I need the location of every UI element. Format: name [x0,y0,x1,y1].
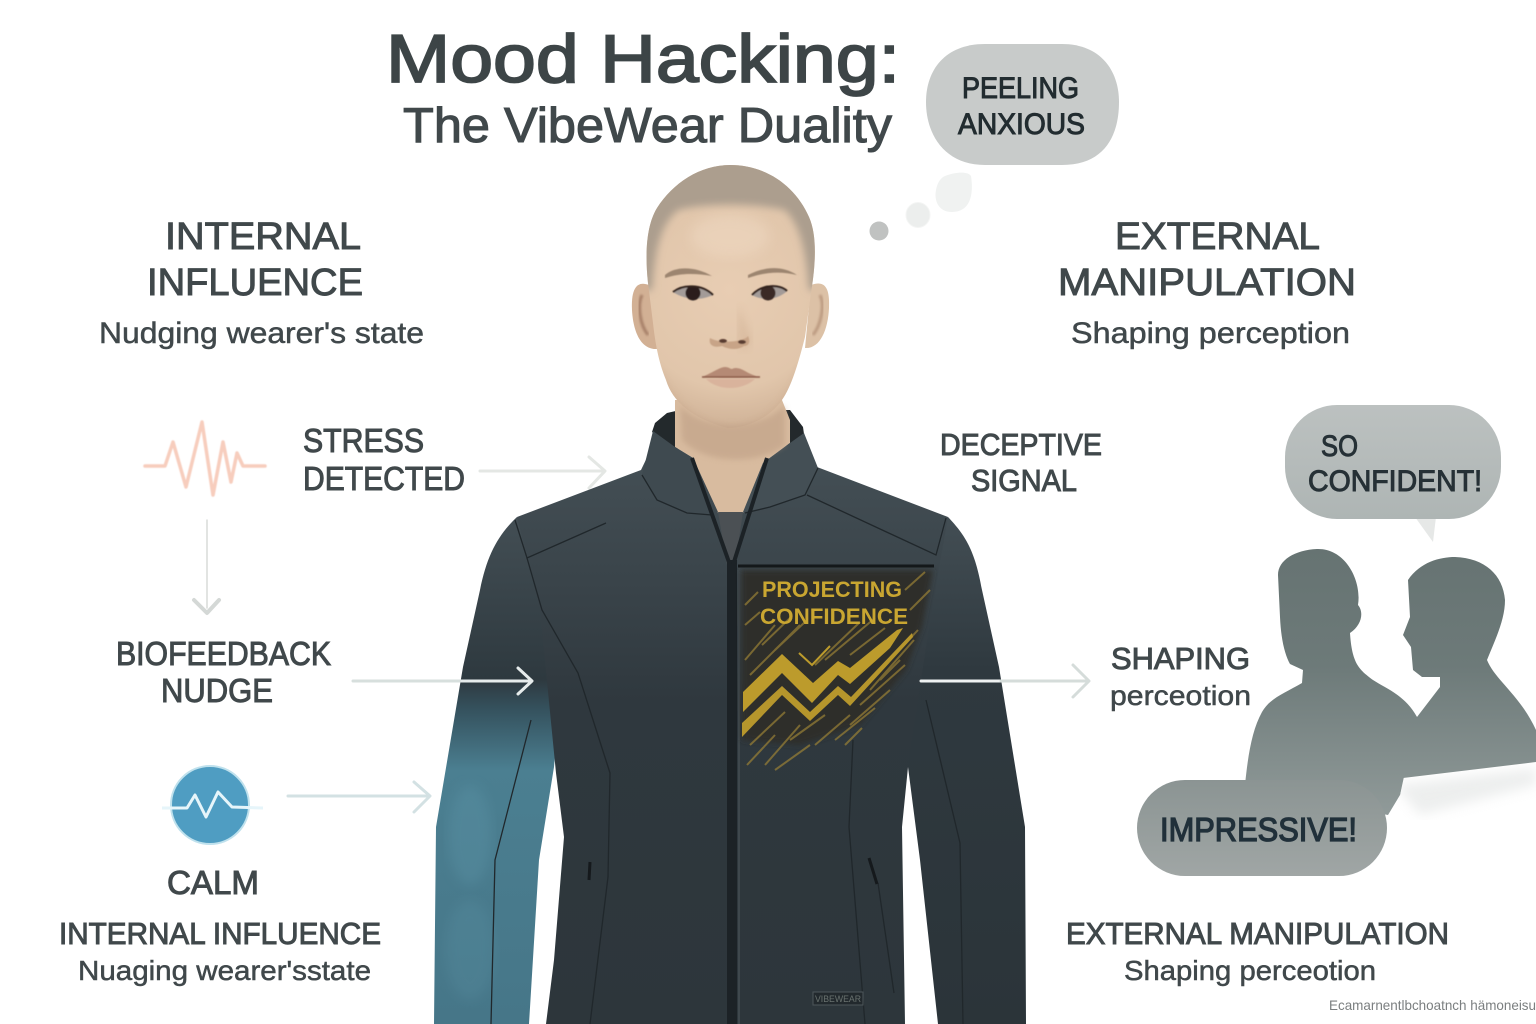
right heading: external manipulation: Shaping perception [1071,317,1350,350]
calm label: CALM [167,864,259,901]
left heading: internal influence: INFLUENCE [147,262,363,304]
deceptive signal label: SIGNAL [971,463,1077,498]
biofeedback nudge label: BIOFEEDBACK [116,635,331,672]
title [386,21,900,153]
jacket label: VIBEWEAR [815,994,861,1004]
chest patch [738,566,934,770]
speech bubble: so confident: SO [1321,430,1358,463]
icon: stress wave [145,422,265,495]
bottom right caption [1066,916,1449,986]
thought bubble: peeling anxious: ANXIOUS [958,108,1085,141]
speech bubble: so confident [1285,405,1501,542]
bottom left caption: INTERNAL INFLUENCE [59,916,381,951]
stress detected label: DETECTED [303,460,465,497]
jacket torso [517,443,948,1024]
ears [632,284,829,349]
thought bubble: peeling anxious: PEELING [962,72,1079,105]
shaping perception label [1110,641,1251,711]
arrow: stress to jacket [480,457,605,488]
arrow: biofeedback to jacket [353,668,532,694]
title: The VibeWear Duality [403,99,893,153]
left heading: internal influence: INTERNAL [165,216,361,258]
right sleeve [900,517,1026,1024]
chest patch: CONFIDENCE [760,604,908,629]
left heading: internal influence: Nudging wearer's state [99,317,424,350]
right heading: external manipulation [1058,216,1356,350]
neck shadow [680,405,785,459]
buzz cut hair [646,165,815,293]
chest patch: PROJECTING [762,577,902,602]
shaping perception label: SHAPING [1111,641,1250,676]
neck [675,400,790,514]
left sleeve (teal) [434,517,566,1024]
inner shirt [718,512,743,565]
bottom right caption: Shaping perceotion [1124,955,1376,986]
jacket collar [642,431,818,515]
pockets [589,858,877,884]
bottom left caption: Nuaging wearer'sstate [78,955,371,986]
right heading: external manipulation: EXTERNAL [1115,216,1320,258]
left heading: internal influence [99,216,424,350]
arrow: stress down to biofeedback [194,520,219,613]
speech bubble: impressive [1137,780,1387,876]
shaping perception label: perceotion [1110,680,1251,711]
stress detected label: STRESS [303,422,424,459]
speech bubble: impressive: IMPRESSIVE! [1160,811,1357,848]
biofeedback nudge label: NUDGE [161,672,273,709]
deceptive signal label: DECEPTIVE [940,427,1102,462]
bottom right caption: EXTERNAL MANIPULATION [1066,916,1449,951]
right heading: external manipulation: MANIPULATION [1058,262,1356,304]
deceptive signal label [940,427,1102,498]
head [647,165,815,428]
arrow: patch to observers [921,665,1089,697]
biofeedback nudge label [116,635,331,709]
arrow: calm to sleeve [288,782,430,812]
observer silhouettes [1245,549,1536,815]
stress detected label [303,422,465,497]
collar lining [652,410,804,450]
icon: calm circle [162,766,263,844]
speech bubble: so confident: CONFIDENT! [1308,465,1482,498]
thought bubble: peeling anxious [870,44,1119,240]
bottom left caption [59,916,381,986]
zipper [692,458,767,1024]
jacket seams [491,468,963,1024]
chin and jaw shading [668,218,786,399]
face features [665,268,797,388]
person wearing jacket [434,150,1026,1024]
title: Mood Hacking: [386,21,900,97]
